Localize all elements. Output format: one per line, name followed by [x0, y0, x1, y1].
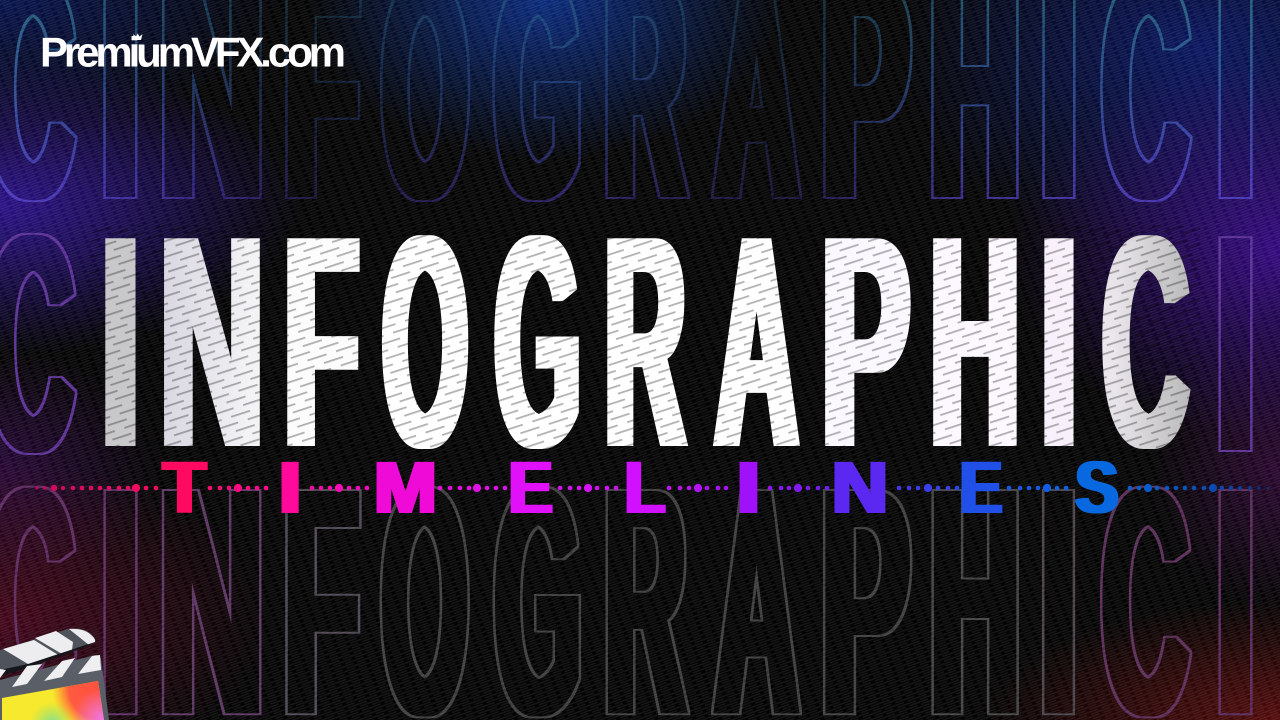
subtitle: TIMELINES: L — [625, 446, 665, 529]
outlined background word: middle row — [0, 171, 1255, 516]
icon: logo crown — [133, 34, 142, 40]
main title: INFOGRAPHIC — [101, 172, 1189, 511]
clapper board with stripes — [0, 655, 109, 720]
subtitle: TIMELINES: N — [832, 447, 888, 530]
main title: INFOGRAPHIC: O — [382, 174, 468, 511]
main title: INFOGRAPHIC: N — [159, 173, 265, 511]
main title: INFOGRAPHIC: I — [101, 173, 140, 510]
clapper arm — [0, 628, 95, 672]
subtitle: TIMELINES: I — [278, 446, 302, 529]
outlined background word: middle row: I — [1216, 171, 1255, 516]
outlined background word: top row — [0, 0, 1253, 202]
main title: INFOGRAPHIC: A — [715, 174, 798, 511]
subtitle: TIMELINES: E — [509, 446, 553, 529]
main title: INFOGRAPHIC: H — [930, 173, 1020, 510]
main title: INFOGRAPHIC: R — [605, 174, 685, 511]
logo: PremiumVFX.com: PremiumVFX.com — [40, 28, 346, 76]
rainbow screen — [2, 681, 104, 720]
subtitle: TIMELINES: E — [960, 446, 1002, 529]
subtitle: TIMELINES: M — [374, 446, 437, 529]
main title: INFOGRAPHIC: P — [821, 174, 910, 511]
main title: INFOGRAPHIC: G — [495, 174, 581, 511]
dotted timeline — [36, 484, 1269, 492]
main title: INFOGRAPHIC: I — [1040, 174, 1077, 511]
subtitle: TIMELINES: I — [736, 447, 761, 529]
subtitle: TIMELINES — [163, 446, 1119, 530]
icon: Final Cut Pro clapperboard — [0, 628, 109, 720]
main title: INFOGRAPHIC: F — [284, 172, 359, 510]
subtitle: TIMELINES: S — [1075, 446, 1119, 529]
subtitle: TIMELINES: T — [163, 447, 206, 529]
fabric dash overlay on title — [90, 225, 1200, 460]
main title: INFOGRAPHIC: C — [1102, 173, 1189, 510]
